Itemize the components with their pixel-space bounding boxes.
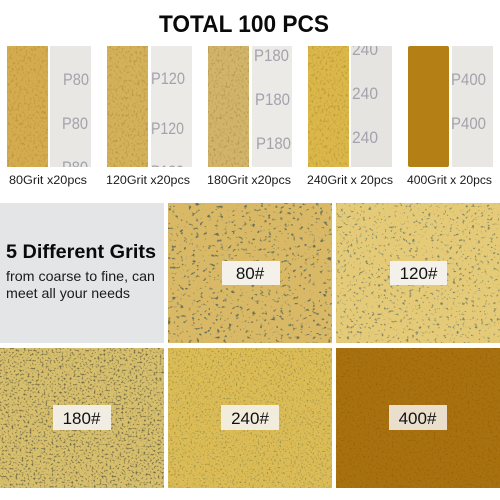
texture: 120 grit bbox=[336, 203, 500, 343]
80 grit white backing bbox=[50, 46, 91, 177]
80 grit caption: 80Grit x20pcs bbox=[9, 175, 87, 187]
80 grit gold strip bbox=[7, 46, 48, 167]
400 grit white backing bbox=[451, 46, 493, 167]
120 grit gold strip bbox=[107, 46, 148, 167]
texture: 400 grit bbox=[336, 348, 500, 488]
texture: 80 grit bbox=[168, 203, 332, 343]
panel: 400 grit sample bbox=[407, 46, 493, 187]
panel: 80 grit sample bbox=[7, 46, 91, 187]
panel: 180 grit sample bbox=[207, 46, 292, 187]
120 grit white backing: P120 bbox=[151, 69, 185, 88]
400 grit caption: 400Grit x 20pcs bbox=[407, 175, 492, 187]
400 grit white backing: P400 bbox=[451, 114, 486, 133]
180 grit white backing: P180 bbox=[256, 134, 291, 153]
label: 120#: 120# bbox=[400, 264, 438, 283]
120 grit white backing: P120 bbox=[151, 119, 184, 138]
label: 180# bbox=[53, 405, 111, 430]
panel: 120 grit sample bbox=[106, 46, 192, 187]
label: 240#: 240# bbox=[231, 409, 269, 428]
panel background bbox=[0, 203, 164, 343]
180 grit white backing: P180 bbox=[255, 90, 290, 109]
panel: 5 different grits bbox=[0, 203, 164, 343]
title: TOTAL 100 PCS bbox=[159, 11, 329, 38]
panel heading: 5 Different Grits bbox=[6, 241, 156, 263]
400 grit gold strip bbox=[408, 46, 449, 167]
label: 240# bbox=[221, 405, 279, 430]
180 grit white backing bbox=[252, 46, 292, 167]
240 grit gold strip bbox=[308, 46, 349, 167]
panel description: meet all your needs bbox=[6, 285, 130, 301]
180 grit white backing: P180 bbox=[254, 46, 289, 65]
180 grit gold strip bbox=[208, 46, 249, 167]
240 grit white backing bbox=[351, 40, 392, 167]
label: 400#: 400# bbox=[399, 409, 437, 428]
label: 120# bbox=[390, 261, 447, 285]
panel description: from coarse to fine, can bbox=[6, 268, 155, 284]
80 grit white backing: P80 bbox=[62, 114, 88, 133]
240 grit white backing: 240 bbox=[352, 40, 378, 59]
120 grit white backing: P120 bbox=[151, 162, 184, 181]
texture: 240 grit bbox=[168, 348, 332, 488]
120 grit white backing bbox=[151, 46, 192, 167]
180 grit caption: 180Grit x20pcs bbox=[207, 175, 291, 187]
label: 80# bbox=[222, 261, 280, 285]
label: 180#: 180# bbox=[63, 409, 101, 428]
240 grit white backing: 240 bbox=[352, 84, 378, 103]
panel: 240 grit sample bbox=[307, 40, 393, 187]
label: 400# bbox=[389, 405, 447, 430]
240 grit white backing: 240 bbox=[352, 128, 378, 147]
label: 80#: 80# bbox=[236, 264, 265, 283]
120 grit caption: 120Grit x20pcs bbox=[106, 175, 190, 187]
400 grit white backing: P400 bbox=[451, 70, 486, 89]
texture: 180 grit bbox=[0, 348, 164, 488]
80 grit white backing: P80 bbox=[63, 70, 89, 89]
240 grit caption: 240Grit x 20pcs bbox=[307, 175, 393, 187]
80 grit white backing: P80 bbox=[62, 158, 88, 177]
